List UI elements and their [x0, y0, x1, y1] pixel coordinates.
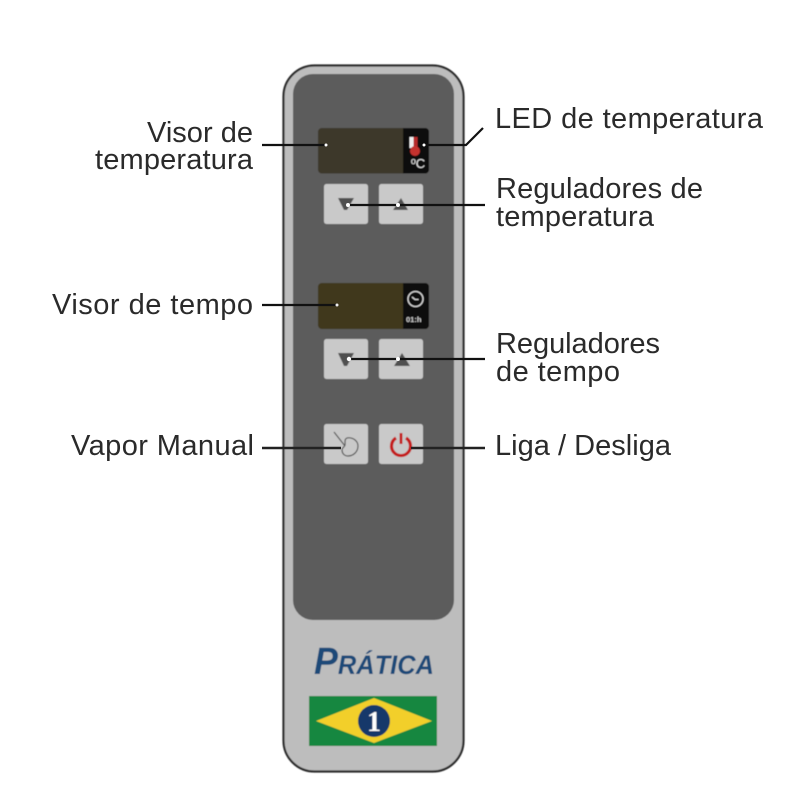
label: Reguladores de tempo: de tempo — [496, 356, 620, 388]
icon: clock: 01:h — [406, 315, 422, 324]
leader line: temperature display — [262, 144, 328, 146]
label: Reguladores de temperatura: temperatura — [496, 201, 655, 233]
power button — [379, 424, 423, 464]
time down button — [324, 339, 368, 379]
label: Visor de tempo: Visor de tempo — [52, 289, 253, 321]
panel: inner dark area — [293, 74, 454, 620]
logo: Pratica: PRÁTICA — [314, 641, 434, 683]
panel: outer casing — [284, 66, 464, 772]
leader line: time display — [262, 304, 338, 306]
label: Visor de temperatura: Visor de — [147, 117, 253, 149]
time display — [318, 283, 429, 329]
label: Visor de temperatura: temperatura — [95, 144, 254, 176]
leader line: manual steam — [262, 447, 341, 449]
temperature display — [318, 128, 429, 174]
control panel — [284, 66, 464, 772]
leader line: temperature regulators — [346, 203, 485, 207]
label: Reguladores de tempo: Reguladores — [496, 328, 660, 360]
icon: thermometer: ºC — [411, 156, 425, 171]
leader line: time regulators — [347, 357, 485, 361]
leader line: power — [411, 447, 485, 449]
temperature down button — [324, 184, 368, 224]
label: Visor de temperatura — [95, 117, 254, 176]
temperature up button — [379, 184, 423, 224]
time up button — [379, 339, 423, 379]
leader line: temperature LED — [422, 128, 483, 146]
label: LED de temperatura: LED de temperatura — [495, 103, 764, 135]
manual steam button — [324, 424, 368, 464]
label: Liga / Desliga: Liga / Desliga — [495, 430, 672, 462]
flag badge — [309, 696, 437, 746]
label: Reguladores de temperatura: Reguladores de — [496, 173, 703, 205]
flag badge: 1 — [367, 707, 381, 738]
label: Vapor Manual: Vapor Manual — [71, 430, 254, 462]
label: Reguladores de temperatura — [496, 173, 703, 233]
label: Reguladores de tempo — [496, 328, 660, 388]
